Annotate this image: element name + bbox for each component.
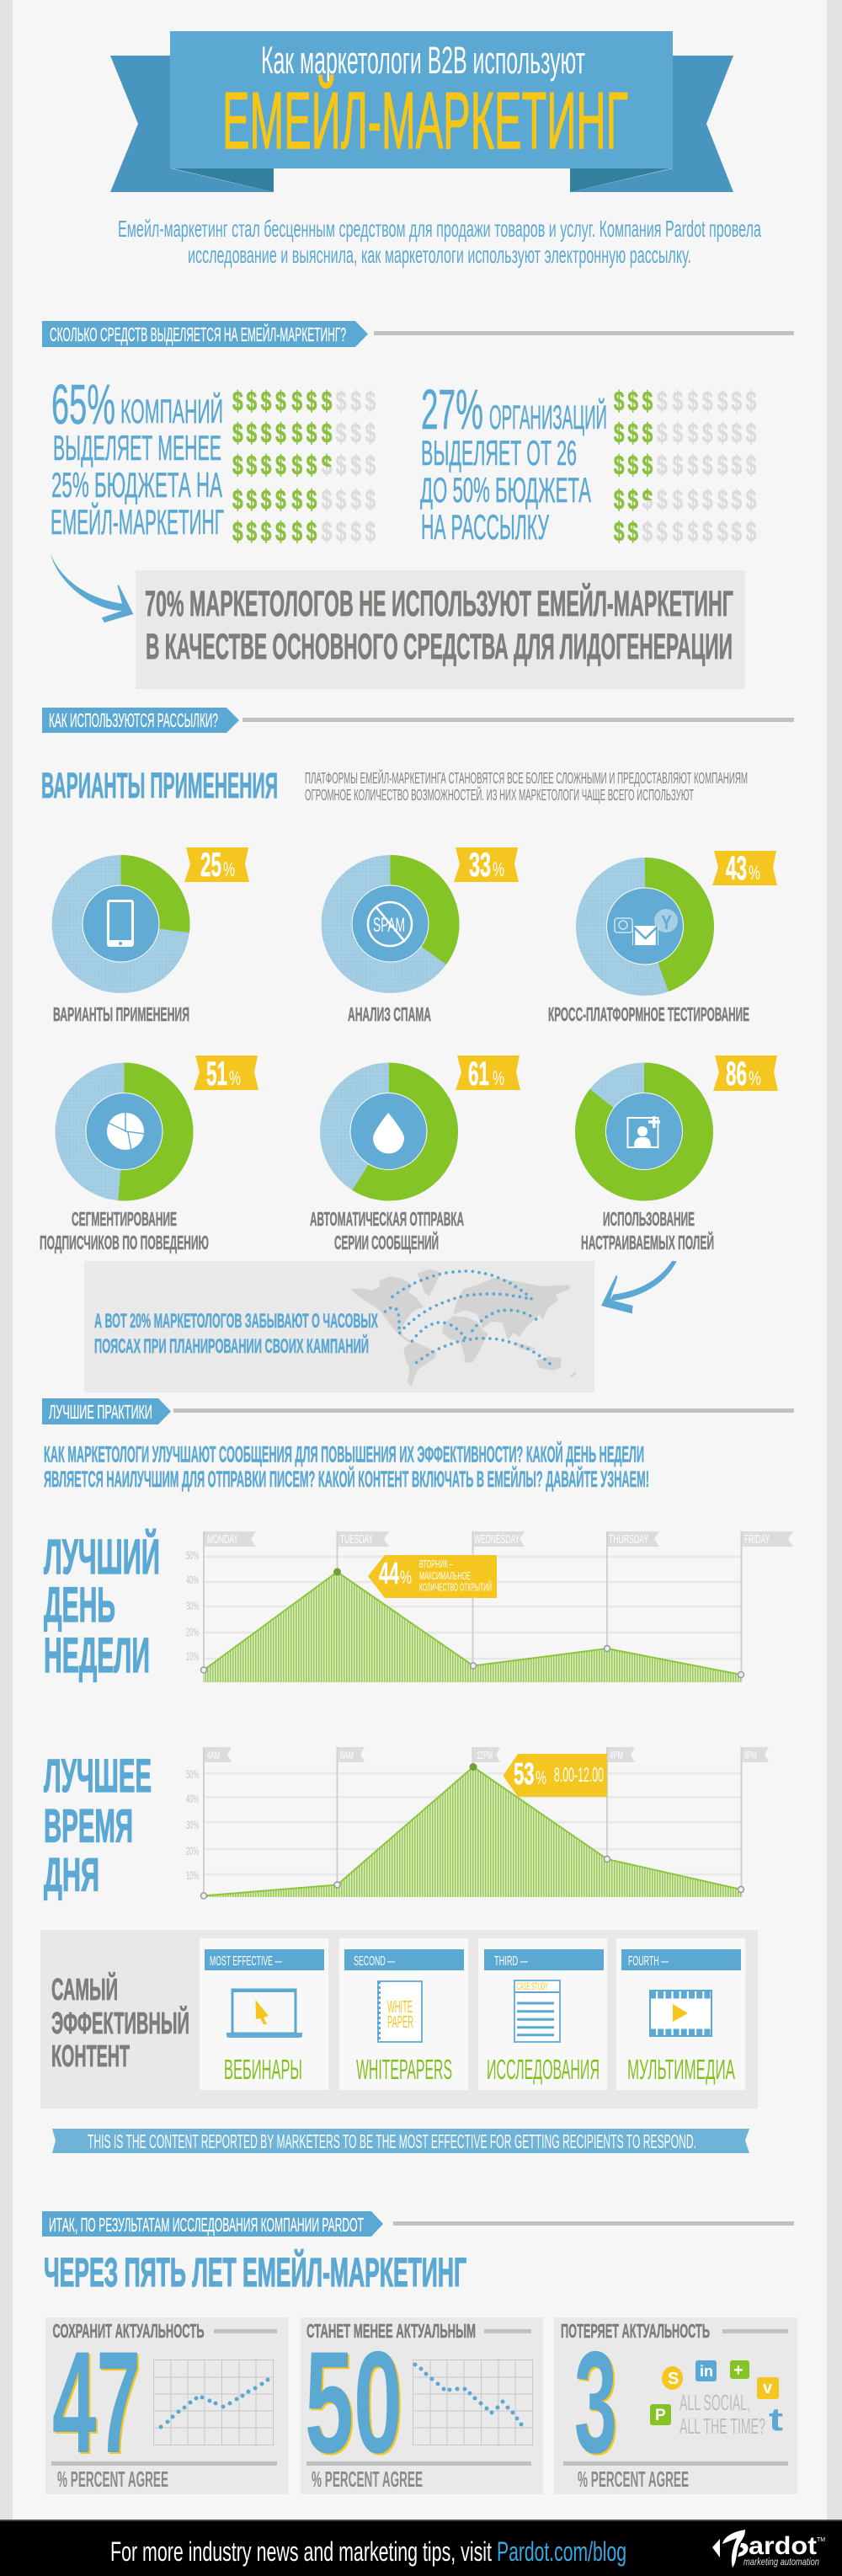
arrow: to 70% callout (51, 553, 133, 623)
heading: best day: ЛУЧШИЙ (44, 1530, 160, 1585)
section tag: usage (42, 708, 794, 733)
best practices intro (44, 1440, 649, 1492)
social caption: ALL SOCIAL, (679, 2390, 750, 2415)
panel: stays relevant: СОХРАНИТ АКТУАЛЬНОСТЬ (52, 2320, 204, 2342)
y axis labels: 40% (186, 1792, 199, 1805)
icon: email clients: Y (661, 911, 672, 934)
donut labels: ПОДПИСЧИКОВ ПО ПОВЕДЕНИЮ (40, 1232, 209, 1253)
use cases description (305, 769, 748, 804)
social icons: S (668, 2370, 679, 2388)
time tabs: 4AM (207, 1749, 220, 1761)
stat text: 65%: ВЫДЕЛЯЕТ МЕНЕЕ (53, 428, 221, 468)
footer link: Pardot.com/blog (497, 2536, 626, 2567)
heading: best time: ВРЕМЯ (44, 1799, 133, 1852)
dollar icons: 65%: $$$$$$$$$$ (232, 418, 376, 448)
donut labels: СЕГМЕНТИРОВАНИЕ (72, 1208, 177, 1230)
time zones text: А ВОТ 20% МАРКЕТОЛОГОВ ЗАБЫВАЮТ О ЧАСОВЫХ (94, 1310, 378, 1333)
chart: best time of day (186, 1747, 769, 1899)
dollar icons: 65%: $$$$$$$$$$ (232, 516, 376, 547)
donut: 25% (52, 855, 190, 993)
card: multimedia: МУЛЬТИМЕДИА (627, 2054, 735, 2085)
callout: 44%: ВТОРНИК – (419, 1558, 453, 1570)
big number 50 (305, 2322, 404, 2485)
badge: 43%: 43 (726, 850, 747, 887)
dollar icons: 27%: $$$ (614, 450, 653, 480)
y axis labels: 30% (186, 1599, 199, 1612)
social icons: + (733, 2361, 743, 2380)
big number 3 (574, 2322, 619, 2485)
day tabs: MONDAY (207, 1532, 238, 1547)
panel: stays relevant: % PERCENT AGREE (57, 2466, 168, 2492)
badge: 33%: 33 (469, 847, 491, 884)
dollar icons: 27%: $$$$$$$$$$ (614, 484, 757, 515)
section tag: best practices: ЛУЧШИЕ ПРАКТИКИ (49, 1401, 152, 1423)
stat text: 27% (420, 378, 607, 547)
icon: email clients (615, 909, 678, 945)
callout: 44%: МАКСИМАЛЬНОЕ (419, 1569, 471, 1582)
donut labels (40, 1003, 749, 1253)
badge: 43% (712, 850, 777, 887)
panel: stays relevant (45, 2317, 288, 2494)
card: whitepapers: WHITEPAPERS (356, 2054, 452, 2085)
time tabs: 12PM (477, 1749, 493, 1761)
panel: time zones (84, 1261, 594, 1392)
panel heading: САМЫЙ (51, 1971, 118, 2007)
section tag: results: ИТАК, ПО РЕЗУЛЬТАТАМ ИССЛЕДОВАНИЯ КОМПАНИИ PARDOT (49, 2214, 364, 2236)
stat text: 65%: КОМПАНИЙ (120, 392, 223, 430)
callout: 53%: 8.00-12.00 (554, 1764, 604, 1787)
panel: loses relevance: ПОТЕРЯЕТ АКТУАЛЬНОСТЬ (561, 2320, 710, 2342)
stat text: 65% (51, 373, 224, 542)
big number 47: 47 (52, 2322, 141, 2483)
badge: 33% (454, 847, 519, 884)
y axis labels: 20% (186, 1844, 199, 1857)
heading: best day: ДЕНЬ (44, 1578, 115, 1633)
panel heading (51, 1971, 189, 2073)
social caption (679, 2390, 765, 2439)
card: multimedia: FOURTH — (628, 1954, 669, 1969)
social icons: t (769, 2402, 783, 2438)
panel: less relevant: % PERCENT AGREE (312, 2466, 423, 2492)
title banner (110, 31, 733, 192)
card: webinars: ВЕБИНАРЫ (224, 2054, 302, 2085)
panel: less relevant (301, 2317, 543, 2494)
social icons: in (700, 2363, 713, 2380)
section tag: results (42, 2211, 794, 2237)
panel: loses relevance: % PERCENT AGREE (578, 2466, 689, 2492)
callout: 44% (368, 1555, 497, 1598)
badge: 61% (456, 1056, 520, 1093)
icon: no spam: SPAM (373, 914, 405, 937)
footer bar (0, 2520, 842, 2576)
heading: best time (44, 1749, 152, 1900)
panel: less relevant: СТАНЕТ МЕНЕЕ АКТУАЛЬНЫМ (306, 2320, 476, 2342)
y axis labels (186, 1767, 199, 1882)
callout: 53%: % (536, 1767, 546, 1788)
time tabs: 4PM (610, 1749, 623, 1761)
donut: 51% (56, 1063, 194, 1201)
dollar icons: 65%: $$$$$$ (232, 484, 317, 515)
dollar icons: 27%: $$$ (614, 386, 653, 416)
panel heading: ЭФФЕКТИВНЫЙ (51, 2005, 189, 2040)
dot chart rising (153, 2360, 274, 2445)
social caption: ALL THE TIME? (679, 2413, 765, 2439)
dollar icons: 65%: $$$$$$$ (232, 418, 333, 448)
dollar icons: 27%: $$ (614, 516, 638, 547)
icon: film strip (650, 1991, 711, 2036)
stat text: 27%: ВЫДЕЛЯЕТ ОТ 26 (421, 433, 577, 473)
stat text: 27%: НА РАССЫЛКУ (421, 507, 549, 547)
flight paths (385, 1271, 550, 1364)
day tabs (205, 1531, 793, 1547)
badge: 61%: % (493, 1067, 504, 1090)
badge: 61%: 61 (468, 1056, 489, 1093)
section tag: budget (42, 321, 794, 347)
time zones text (94, 1310, 378, 1358)
donut: 86% (575, 1063, 713, 1201)
section tag: budget: СКОЛЬКО СРЕДСТВ ВЫДЕЛЯЕТСЯ НА ЕМЕЙЛ-МАРКЕТИНГ? (50, 323, 346, 345)
text: ВАРИАНТЫ ПРИМЕНЕНИЯ (41, 766, 278, 806)
badge: 51%: % (229, 1067, 241, 1090)
heading: best time: ДНЯ (44, 1848, 99, 1900)
dot chart falling (413, 2360, 533, 2445)
big number 3: 3 (576, 2323, 619, 2485)
donut: 33% (322, 855, 460, 993)
icon: laptop (226, 1989, 302, 2038)
icon: custom field (628, 1116, 660, 1147)
time tabs: 8PM (744, 1749, 757, 1761)
area series (200, 1569, 744, 1682)
stat text: 65%: 65% (51, 373, 115, 436)
badge: 25%: % (223, 858, 235, 881)
card: case studies: ИССЛЕДОВАНИЯ (487, 2054, 600, 2085)
day tabs: WEDNESDAY (474, 1532, 520, 1547)
big number 50: 50 (306, 2323, 404, 2485)
stat text: 27%: 27% (421, 378, 483, 441)
card: case studies: THIRD — (494, 1954, 528, 1969)
pardot logo: marketing automation (743, 2556, 819, 2568)
icon: drop (373, 1113, 404, 1154)
card: whitepapers: SECOND — (354, 1954, 395, 1969)
dollar icons: 65%: $$$$$$ (232, 516, 317, 547)
donut labels: АНАЛИЗ СПАМА (348, 1003, 431, 1025)
donut labels: СЕРИИ СООБЩЕНИЙ (334, 1231, 439, 1253)
callout: 53%: 53 (514, 1756, 534, 1791)
callout: 70% marketers (136, 570, 745, 689)
footer text: For more industry news and marketing tips, visit (110, 2536, 492, 2567)
day tabs: THURSDAY (609, 1532, 648, 1547)
donut labels: ВАРИАНТЫ ПРИМЕНЕНИЯ (53, 1003, 189, 1025)
social icons: P (655, 2407, 666, 2424)
dollar icons: 27%: $$ (614, 484, 638, 515)
time zones text: ПОЯСАХ ПРИ ПЛАНИРОВАНИИ СВОИХ КАМПАНИЙ (94, 1334, 369, 1358)
y axis labels: 50% (186, 1767, 199, 1781)
callout: 44%: КОЛИЧЕСТВО ОТКРЫТИЙ (419, 1580, 492, 1594)
dollar icons: 65%: $$$$$$ (232, 450, 317, 480)
icon: case study (514, 1980, 560, 2042)
chart: best day of week (186, 1531, 793, 1682)
y axis labels (186, 1548, 199, 1663)
dollar icons: 65%: $ (322, 450, 333, 480)
icon: white paper: WHITE (387, 1998, 413, 2017)
social icons: v (763, 2379, 773, 2397)
y axis labels: 20% (186, 1625, 199, 1638)
donut labels: НАСТРАИВАЕМЫХ ПОЛЕЙ (581, 1231, 714, 1253)
section tag: usage: КАК ИСПОЛЬЗУЮТСЯ РАССЫЛКИ? (49, 709, 218, 731)
card: webinars (200, 1938, 328, 2090)
pardot logo: ardot (749, 2532, 817, 2560)
icon: phone (108, 901, 133, 946)
dollar icons: 65%: $$$$$$$ (232, 386, 333, 416)
panel: most effective content (40, 1930, 758, 2108)
badge: 86%: 86 (726, 1056, 747, 1093)
dollar icons: 27%: $$$$$$$$$$ (614, 418, 757, 448)
panel: loses relevance (554, 2317, 797, 2494)
donut: 43% (576, 858, 714, 996)
badge: 86% (713, 1056, 778, 1093)
stat text: 65%: 25% БЮДЖЕТА НА (51, 465, 222, 505)
badge: 25%: 25 (200, 847, 221, 884)
dollar icons: 65%: $$$$$$$$$$ (232, 386, 376, 416)
callout: 44%: % (400, 1567, 412, 1588)
donut labels: АВТОМАТИЧЕСКАЯ ОТПРАВКА (310, 1208, 464, 1230)
dollar icons: 65% (232, 386, 376, 547)
text: ОРГАНИЗАЦИЙ (489, 398, 607, 436)
day tabs: TUESDAY (340, 1532, 373, 1547)
heading: five years: ЧЕРЕЗ ПЯТЬ ЛЕТ ЕМЕЙЛ-МАРКЕТИНГ (44, 2249, 466, 2295)
badge: 43%: % (749, 862, 760, 884)
y axis labels: 40% (186, 1573, 199, 1586)
card: case studies (478, 1938, 607, 2090)
icon: case study: CASE STUDY (517, 1980, 548, 1992)
area series (200, 1763, 744, 1899)
social icons (650, 2360, 783, 2438)
section tag: best practices (42, 1398, 794, 1424)
text: ЕМЕЙЛ-МАРКЕТИНГ (51, 501, 224, 542)
stat text: 27%: ДО 50% БЮДЖЕТА (420, 470, 591, 510)
big number 3: 3 (574, 2322, 617, 2483)
time tabs: 8AM (340, 1749, 354, 1761)
dollar icons: 27%: $$$$$$$$$$ (614, 450, 757, 480)
dollar icons: 65%: $$$$$$$$$$ (232, 450, 376, 480)
icon: white paper: PAPER (387, 2013, 413, 2032)
dollar icons: 65%: $$$$$$$$$$ (232, 484, 376, 515)
world map (351, 1269, 577, 1387)
dollar icons: 27%: $$$$$$$$$$ (614, 516, 757, 547)
badge: 86%: % (749, 1067, 761, 1090)
icon: white paper (378, 1981, 422, 2042)
y axis labels: 10% (186, 1868, 199, 1882)
panel heading: КОНТЕНТ (51, 2039, 130, 2073)
y axis labels: 50% (186, 1548, 199, 1562)
card: multimedia (616, 1938, 745, 2090)
y axis labels: 10% (186, 1649, 199, 1663)
heading: best day: НЕДЕЛИ (44, 1628, 150, 1683)
callout: 44%: 44 (379, 1556, 399, 1590)
icon: pie chart (107, 1113, 145, 1151)
big number 47: 47 (54, 2323, 142, 2485)
badge: 51%: 51 (206, 1056, 227, 1093)
badge: 25% (184, 847, 249, 884)
heading: best time: ЛУЧШЕЕ (44, 1749, 152, 1802)
y axis labels: 30% (186, 1818, 199, 1831)
time tabs (205, 1747, 769, 1762)
donut labels: ИСПОЛЬЗОВАНИЕ (603, 1208, 695, 1230)
badge: 51% (194, 1056, 258, 1093)
big number 47 (52, 2322, 142, 2485)
callout: 53% (504, 1754, 607, 1797)
arrow: to time zones (601, 1261, 677, 1313)
card: whitepapers (339, 1938, 468, 2090)
title line 1: Как маркетологи B2B используют (261, 39, 585, 82)
dollar icons: 27%: $ (642, 484, 653, 515)
heading: best day (44, 1530, 160, 1683)
intro text (118, 216, 761, 268)
dollar icons: 27% (614, 386, 757, 547)
day tabs: FRIDAY (744, 1532, 770, 1547)
icon: no spam (368, 902, 412, 946)
card: webinars: MOST EFFECTIVE — (210, 1954, 282, 1969)
big number 50: 50 (305, 2322, 402, 2483)
dollar icons: 27%: $$$$$$$$$$ (614, 386, 757, 416)
badge: 33%: % (493, 858, 504, 881)
dollar icons: 27%: $$$ (614, 418, 653, 448)
donut: 61% (320, 1063, 458, 1201)
pardot logo: TM (817, 2537, 825, 2543)
pardot logo (712, 2530, 825, 2568)
